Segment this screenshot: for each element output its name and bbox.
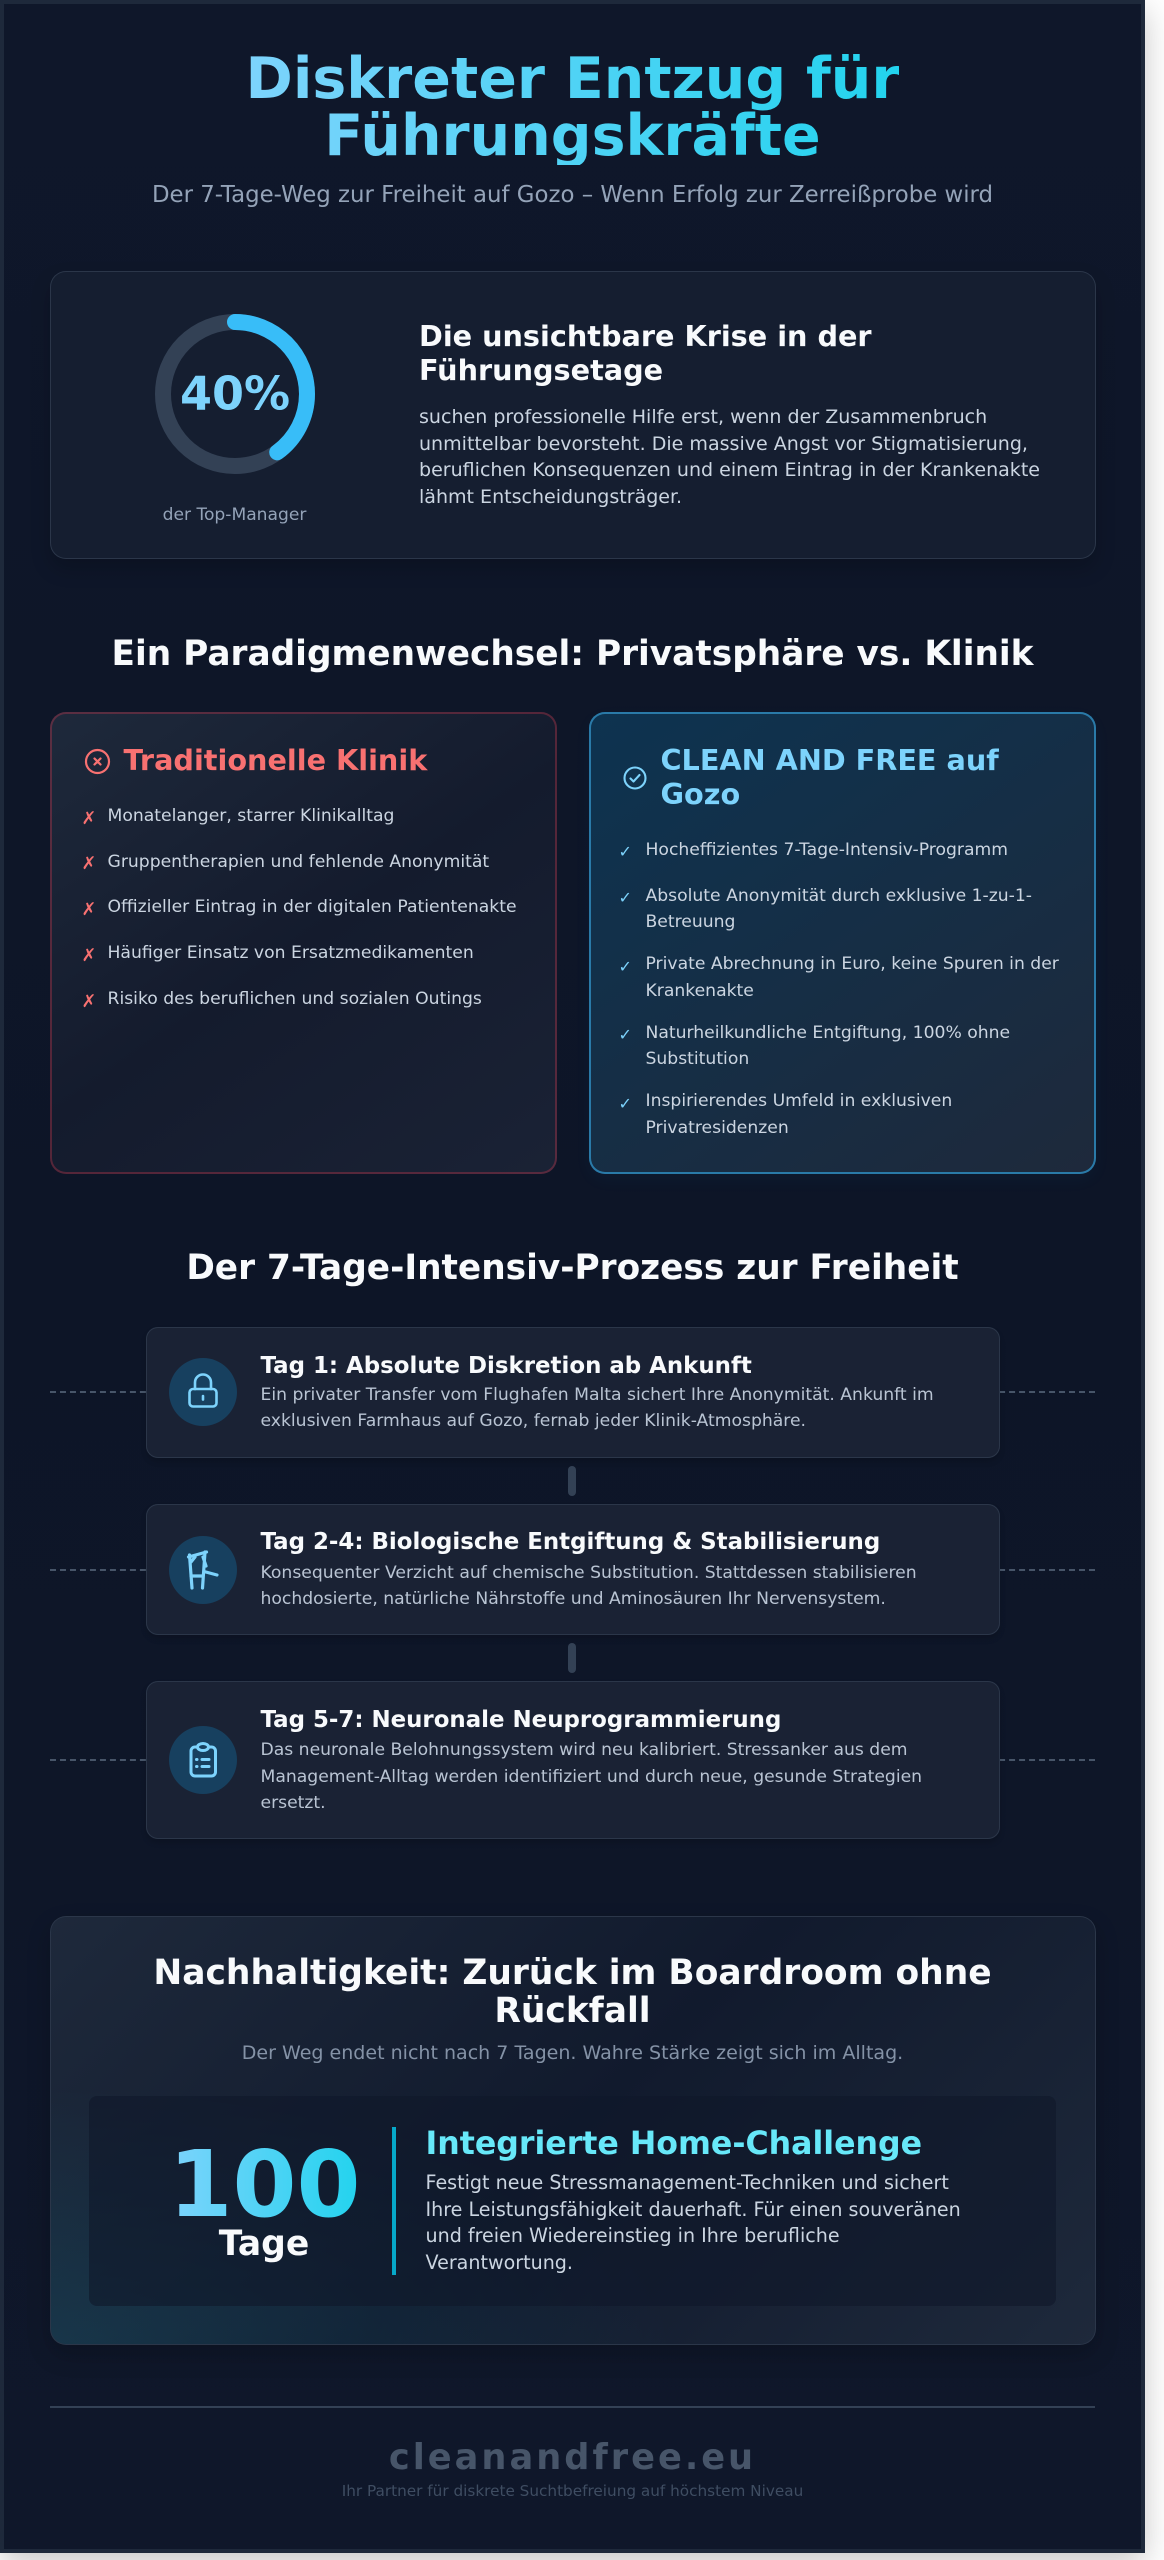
heading: sustainability <box>153 1953 992 2031</box>
title <box>246 46 899 169</box>
subheading: Der Weg endet nicht nach 7 Tagen. Wahre Stärke zeigt sich im Alltag. <box>242 2042 903 2064</box>
text: home challenge <box>426 2171 961 2274</box>
icon: clipboard <box>169 1726 237 1794</box>
text: crisis description: lähmt Entscheidungsträger. <box>419 486 682 508</box>
text: crisis description: unmittelbar bevorsteht. Die massive Angst vor Stigmatisierung, <box>419 433 1028 455</box>
step 3 card <box>146 1680 1000 1839</box>
list item: Hocheffizientes 7-Tage-Intensiv-Programm <box>646 840 1008 860</box>
list item: Häufiger Einsatz von Ersatzmedikamenten <box>108 943 474 963</box>
list item <box>618 886 1032 932</box>
heading: crisis: Führungsetage <box>419 353 663 387</box>
title: Diskreter Entzug für <box>246 46 899 112</box>
panel: traditional clinic <box>50 712 557 1174</box>
panel: invisible crisis statistic <box>50 270 1096 559</box>
heading: sustainability: Rückfall <box>494 1991 651 2031</box>
list item: ✓ <box>618 1094 632 1113</box>
step text: Das neuronale Belohnungssystem wird neu kalibriert. Stressanker aus dem <box>260 1740 908 1760</box>
text: crisis description <box>419 406 1040 508</box>
step text <box>260 1385 934 1431</box>
list item: ✗ <box>82 946 96 966</box>
list item <box>618 1023 1010 1069</box>
list item <box>618 1091 952 1138</box>
heading: sustainability: Nachhaltigkeit: Zurück im Boardroom ohne <box>153 1953 992 1993</box>
heading: crisis: Die unsichtbare Krise in der <box>419 319 872 353</box>
text: home challenge: Verantwortung. <box>426 2251 573 2274</box>
list item: Gruppentherapien und fehlende Anonymität <box>108 852 489 872</box>
step text: Ein privater Transfer vom Flughafen Malta sichert Ihre Anonymität. Ankunft im <box>260 1385 934 1405</box>
list item: ✓ <box>618 957 632 976</box>
list item: Inspirierendes Umfeld in exklusiven <box>646 1091 952 1111</box>
list item: ✓ <box>618 888 632 907</box>
list item: Monatelanger, starrer Klinikalltag <box>108 806 394 826</box>
stat unit: Tage: Tage <box>219 2224 309 2264</box>
connector <box>568 1643 576 1673</box>
step text <box>260 1740 922 1813</box>
chart: 40 percent ring <box>155 314 315 474</box>
heading: crisis <box>419 319 872 387</box>
heading: clean and free: Gozo <box>660 777 740 811</box>
heading: process: Der 7-Tage-Intensiv-Prozess zur Freiheit <box>186 1248 959 1288</box>
heading: clean and free: CLEAN AND FREE auf <box>660 743 999 777</box>
panel: sustainability <box>50 1916 1096 2345</box>
step text: exklusiven Farmhaus auf Gozo, fernab jeder Klinik-Atmosphäre. <box>260 1411 806 1431</box>
list item: ✓ <box>618 842 632 861</box>
title: Führungskräfte <box>324 103 821 169</box>
list item: Betreuung <box>646 912 735 932</box>
list item: Krankenakte <box>646 981 754 1001</box>
list item: Risiko des beruflichen und sozialen Outings <box>108 989 482 1009</box>
list item: Absolute Anonymität durch exklusive 1-zu-1- <box>646 886 1032 906</box>
list item: ✗ <box>82 809 96 829</box>
divider <box>392 2127 396 2275</box>
icon: circle x <box>84 748 110 774</box>
heading: home challenge: Integrierte Home-Challenge <box>426 2126 922 2162</box>
step text: hochdosierte, natürliche Nährstoffe und Aminosäuren Ihr Nervensystem. <box>260 1589 886 1609</box>
text: home challenge: Ihre Leistungsfähigkeit dauerhaft. Für einen souveränen <box>426 2198 961 2221</box>
icon: lock <box>169 1358 237 1426</box>
list item <box>618 954 1059 1001</box>
icon: circle check <box>623 766 646 790</box>
step text <box>260 1563 917 1609</box>
heading: clean and free <box>660 743 999 811</box>
text: home challenge: und freien Wiedereinstieg in Ihre berufliche <box>426 2224 840 2247</box>
subtitle: Der 7-Tage-Weg zur Freiheit auf Gozo – Wenn Erfolg zur Zerreißprobe wird <box>152 182 993 208</box>
text: home challenge: Festigt neue Stressmanagement-Techniken und sichert <box>426 2171 949 2194</box>
step text: ersetzt. <box>260 1793 326 1813</box>
panel: home challenge <box>89 2096 1056 2306</box>
heading: traditional clinic: Traditionelle Klinik <box>124 743 427 777</box>
connector <box>568 1466 576 1496</box>
list item: Privatresidenzen <box>646 1118 789 1138</box>
list item: Substitution <box>646 1049 749 1069</box>
list item: ✗ <box>82 992 96 1012</box>
step text: Management-Alltag werden identifiziert und durch neue, gesunde Strategien <box>260 1767 922 1787</box>
list item: ✗ <box>82 854 96 874</box>
icon: detox figure <box>169 1536 237 1604</box>
list item: ✓ <box>618 1025 632 1044</box>
step text: Konsequenter Verzicht auf chemische Substitution. Stattdessen stabilisieren <box>260 1563 917 1583</box>
step 2 card <box>146 1504 1000 1635</box>
step title: Tag 1: Absolute Diskretion ab Ankunft <box>260 1353 752 1379</box>
list item: Private Abrechnung in Euro, keine Spuren in der <box>646 954 1059 974</box>
chart: 40 percent ring: 40% <box>179 366 290 420</box>
list item: ✗ <box>82 900 96 920</box>
panel: clean and free <box>588 712 1096 1174</box>
step 1 card <box>146 1326 1000 1458</box>
heading: paradigm shift: Ein Paradigmenwechsel: Privatsphäre vs. Klinik <box>112 634 1034 674</box>
footer brand: cleanandfree.eu <box>389 2437 756 2478</box>
text: crisis description: suchen professionelle Hilfe erst, wenn der Zusammenbruch <box>419 406 987 428</box>
chart label: der Top-Manager <box>163 504 306 524</box>
list item: Offizieller Eintrag in der digitalen Patientenakte <box>108 897 517 917</box>
stat: 100: 100 <box>168 2131 361 2238</box>
step title: Tag 2-4: Biologische Entgiftung & Stabilisierung <box>260 1529 880 1555</box>
list item: Naturheilkundliche Entgiftung, 100% ohne <box>646 1023 1010 1043</box>
step title: Tag 5-7: Neuronale Neuprogrammierung <box>260 1707 781 1733</box>
text: crisis description: beruflichen Konsequenzen und einem Eintrag in der Krankenakte <box>419 459 1040 481</box>
footer tagline: Ihr Partner für diskrete Suchtbefreiung auf höchstem Niveau <box>342 2482 803 2500</box>
